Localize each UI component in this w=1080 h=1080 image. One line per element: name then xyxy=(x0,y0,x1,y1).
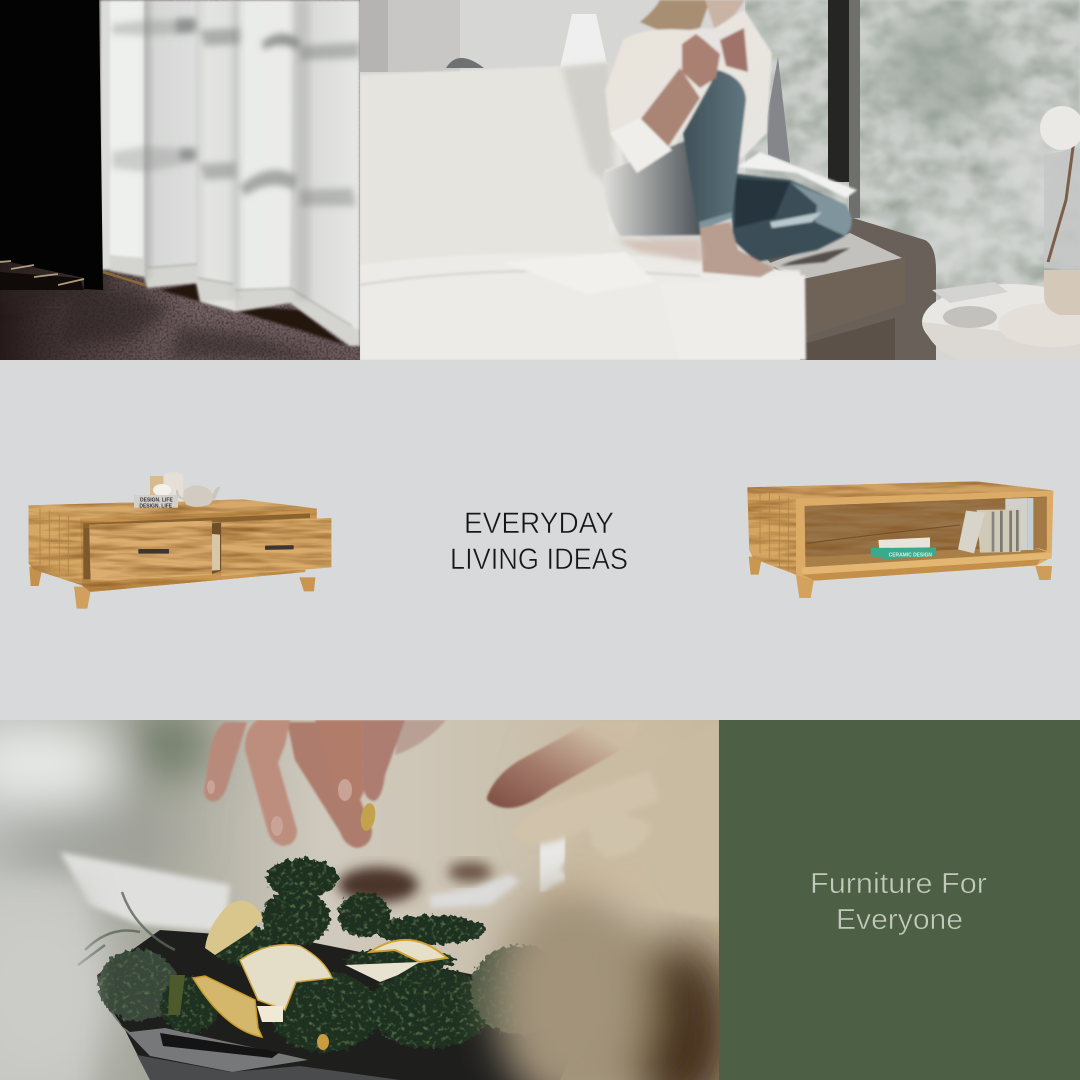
window view xyxy=(745,0,1080,300)
books stack: CERAMIC DESIGN xyxy=(889,553,932,559)
blurred background xyxy=(0,720,719,1080)
panel: woman on sofa photo xyxy=(360,0,1080,360)
panel: cooking photo xyxy=(0,720,719,1080)
dark gap beneath the curtain xyxy=(160,283,345,345)
white glass xyxy=(540,830,565,892)
books stack xyxy=(871,537,936,559)
text: furniture for everyone: Everyone xyxy=(836,904,963,936)
heading: everyday living ideas: EVERYDAY xyxy=(464,507,614,540)
broccoli xyxy=(98,858,570,1052)
front rail xyxy=(802,553,1051,575)
hands xyxy=(682,34,720,88)
dark blur behind dish xyxy=(338,867,418,903)
white throw on sofa xyxy=(360,62,806,360)
dish xyxy=(78,858,600,1080)
faded hip xyxy=(603,140,702,236)
side table and vase xyxy=(922,106,1080,360)
hair xyxy=(640,0,710,34)
foot xyxy=(700,222,775,277)
front frame xyxy=(796,491,1053,581)
upright books xyxy=(958,498,1033,553)
cup xyxy=(698,28,738,68)
neck xyxy=(705,0,745,30)
panel: grey band xyxy=(0,360,1080,720)
thigh xyxy=(730,173,852,262)
stems xyxy=(78,892,175,965)
left hand fingers xyxy=(204,720,446,848)
shirt xyxy=(605,10,772,173)
legs xyxy=(29,567,43,586)
handles xyxy=(138,549,169,554)
decor xyxy=(150,476,166,496)
books with text: DESIGN. LIFE xyxy=(139,503,173,509)
table body xyxy=(747,481,1053,575)
shelf back xyxy=(805,497,1047,557)
image: coffee table with drawers xyxy=(28,472,332,609)
table body xyxy=(29,499,317,592)
hem bands xyxy=(110,255,360,346)
heading: everyday living ideas xyxy=(450,507,628,576)
person xyxy=(603,0,852,277)
grey back cushion xyxy=(767,57,790,163)
nail highlights xyxy=(207,779,352,836)
text: furniture for everyone xyxy=(810,868,987,936)
text: furniture for everyone: Furniture For xyxy=(810,868,987,900)
sofa arm and cushion xyxy=(760,218,936,360)
rolled sleeve xyxy=(610,118,672,173)
white slab behind pan xyxy=(60,852,230,932)
white pillow xyxy=(737,152,857,198)
sheer curtain xyxy=(100,0,360,346)
food crumb xyxy=(359,802,377,832)
forearm xyxy=(640,68,700,147)
drawers xyxy=(89,518,331,582)
shin xyxy=(683,70,746,228)
legs xyxy=(749,557,762,575)
washed-out right side xyxy=(495,890,645,1080)
washed-out left side xyxy=(0,880,90,1080)
panel: green block xyxy=(719,720,1080,1080)
books with text: DESIGN. LIFE xyxy=(140,498,173,504)
image: coffee table with open shelf xyxy=(747,481,1054,598)
books with text xyxy=(134,495,178,509)
right hand xyxy=(487,720,719,920)
fork xyxy=(430,874,520,908)
panel: curtain photo xyxy=(0,0,360,360)
wall xyxy=(360,0,1080,360)
teapot xyxy=(177,485,221,507)
lemons xyxy=(168,901,447,1050)
floor shadows xyxy=(0,262,330,360)
black curtain xyxy=(0,0,103,290)
carpet floor xyxy=(0,0,360,360)
pan xyxy=(97,930,600,1080)
window-bar shadows xyxy=(112,0,360,300)
